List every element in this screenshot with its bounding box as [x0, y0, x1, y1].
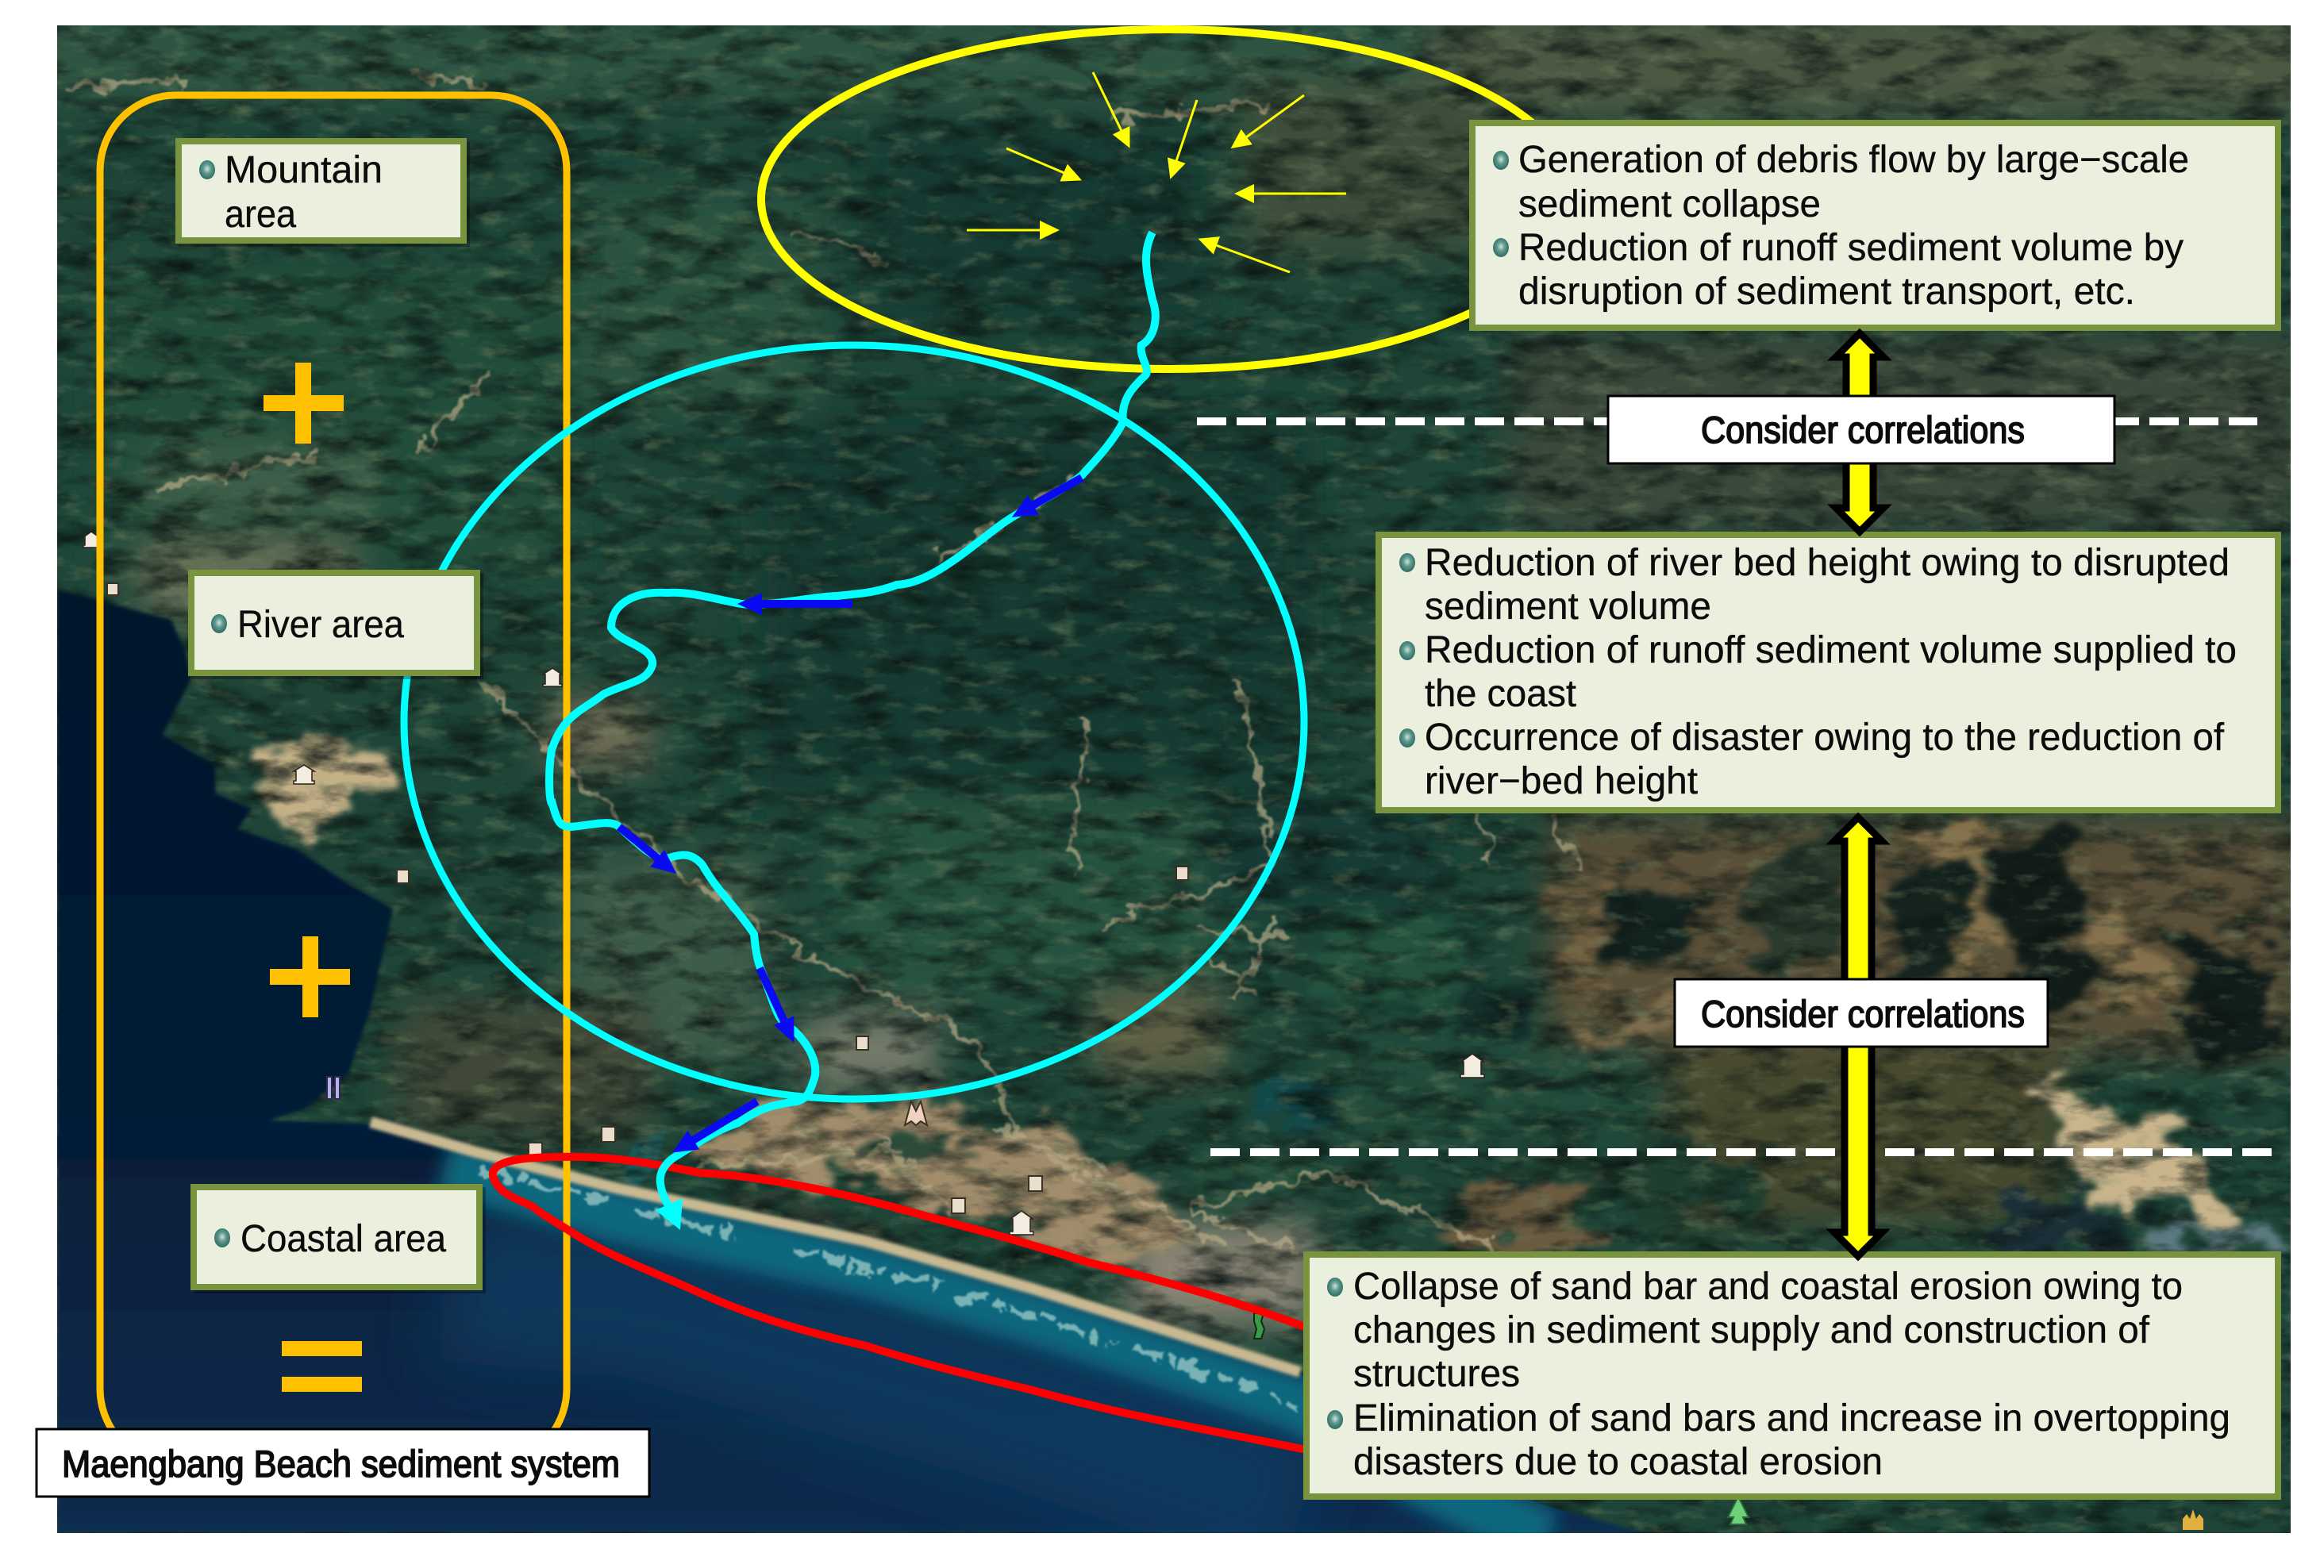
beach — [371, 1122, 1300, 1372]
callout: consider correlations upper: Consider correlations — [1701, 409, 2025, 451]
surf — [484, 1168, 1302, 1406]
ocean — [57, 590, 1644, 1533]
label: River area — [191, 573, 483, 679]
equals sign — [282, 1341, 362, 1392]
panel: coastal area impacts — [1306, 1255, 2281, 1500]
label: Mountain area: Mountain — [225, 149, 383, 191]
plus sign 2 — [270, 936, 350, 1017]
label: Coastal area — [194, 1187, 486, 1293]
panel: coastal area impacts: changes in sediment supply and construction of — [1353, 1309, 2150, 1351]
blue flow arrows — [619, 478, 1082, 1140]
farmland, forest, lake and ridge patches — [230, 738, 2291, 1262]
panel: river area impacts: river−bed height — [1425, 760, 1698, 802]
label: Mountain area — [179, 141, 470, 247]
panel: coastal area impacts: disasters due to coastal erosion — [1353, 1441, 1883, 1483]
label: Mountain area: area — [225, 194, 296, 236]
title: Maengbang Beach sediment system: Maengbang Beach sediment system — [62, 1443, 620, 1485]
cyan circle: river area — [404, 345, 1304, 1099]
panel: river area impacts: Reduction of river bed height owing to disrupted — [1425, 542, 2230, 584]
panel: mountain area impacts — [1472, 123, 2281, 331]
yellow ellipse: mountain area — [761, 29, 1576, 369]
panel: river area impacts — [1379, 535, 2281, 813]
label: Coastal area: Coastal area — [240, 1218, 446, 1260]
panel: river area impacts: Occurrence of disaster owing to the reduction of — [1425, 717, 2225, 759]
river course — [549, 233, 1156, 1230]
water gradients clipped to ocean — [444, 1166, 1548, 1539]
panel: mountain area impacts: Generation of debris flow by large−scale — [1518, 139, 2189, 181]
callout: consider correlations lower: Consider correlations — [1701, 993, 2025, 1035]
panel: coastal area impacts: Collapse of sand bar and coastal erosion owing to — [1353, 1266, 2183, 1308]
valley roads and streams — [67, 71, 1579, 1249]
callout: consider correlations upper — [1608, 396, 2114, 463]
lagoon at the river mouth — [621, 1132, 665, 1190]
double arrow: mountain to river — [1836, 333, 1883, 532]
panel: coastal area impacts: Elimination of sand bars and increase in overtopping — [1353, 1397, 2230, 1439]
red ellipse: coastal area — [493, 1157, 1318, 1452]
plus sign 1 — [264, 363, 344, 444]
panel: coastal area impacts: structures — [1353, 1353, 1520, 1395]
panel: mountain area impacts: sediment collapse — [1518, 183, 1821, 225]
yellow sediment convergence arrows — [967, 72, 1346, 272]
panel: river area impacts: the coast — [1425, 673, 1576, 715]
panel: mountain area impacts: Reduction of runoff sediment volume by — [1518, 227, 2184, 269]
panel: mountain area impacts: disruption of sediment transport, etc. — [1518, 271, 2135, 313]
panel: river area impacts: Reduction of runoff sediment volume supplied to — [1425, 629, 2237, 671]
dashed divider: mountain and river — [1197, 417, 2257, 425]
double arrow: river to coast — [1834, 817, 1882, 1256]
system boundary rounded rectangle — [100, 95, 567, 1464]
river mouth arrowhead — [656, 1198, 683, 1230]
offshore island — [610, 1189, 654, 1218]
panel: river area impacts: sediment volume — [1425, 586, 1711, 628]
dashed divider: river and coast — [1210, 1148, 2272, 1156]
map landmark icons — [83, 532, 2203, 1530]
title: Maengbang Beach sediment system — [37, 1429, 649, 1497]
callout: consider correlations lower — [1675, 979, 2048, 1047]
label: River area: River area — [237, 604, 404, 646]
